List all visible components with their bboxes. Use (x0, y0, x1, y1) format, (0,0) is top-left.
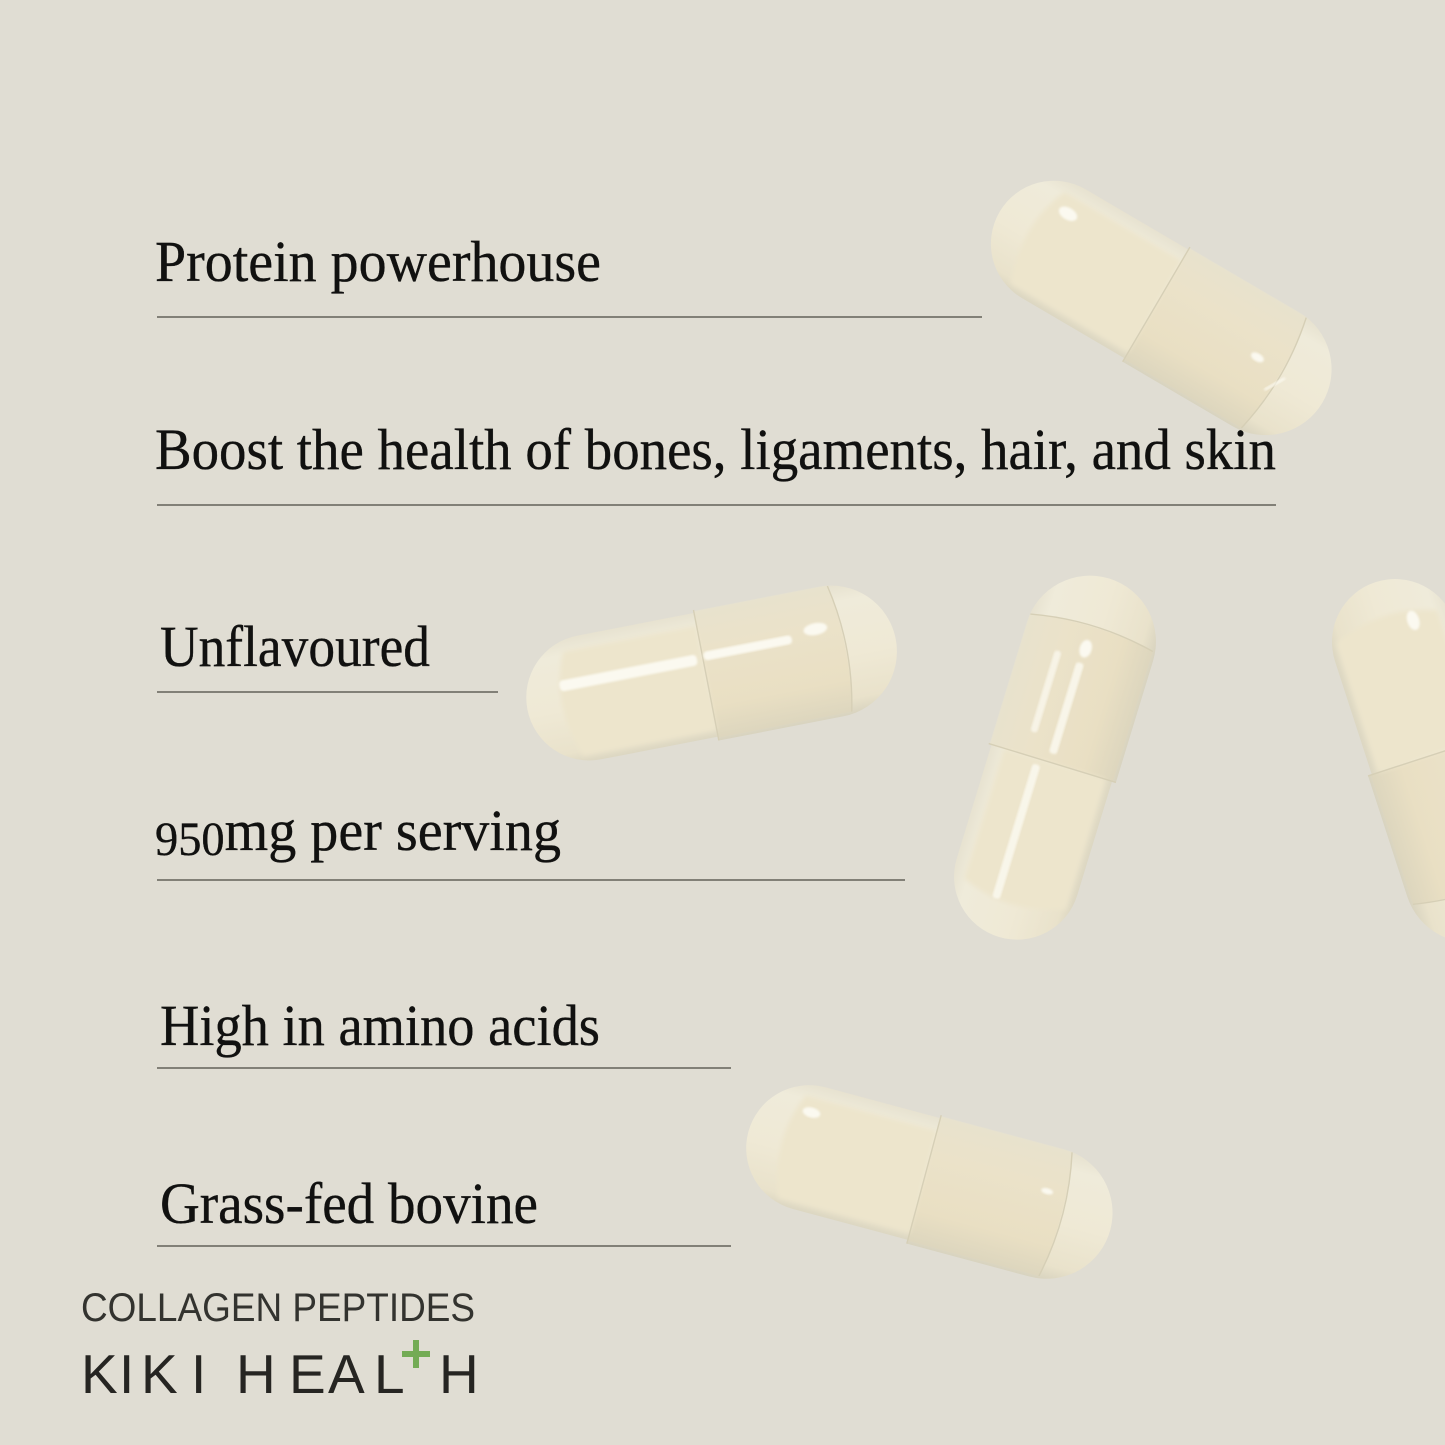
icon: green plus (402, 1340, 430, 1368)
brand logo: H (439, 1343, 479, 1405)
feature: 950mg per serving: 950 (155, 813, 225, 866)
feature: high in amino acids: High in amino acids (160, 993, 600, 1058)
feature: protein powerhouse: Protein powerhouse (155, 229, 601, 294)
capsule: right edge, cropped (1312, 562, 1445, 959)
product name: COLLAGEN PEPTIDES (81, 1286, 475, 1330)
capsule: lower (731, 1068, 1128, 1294)
feature: 950mg per serving (155, 798, 905, 880)
feature: unflavoured: Unflavoured (160, 614, 430, 679)
feature: grass-fed bovine: Grass-fed bovine (160, 1171, 538, 1236)
feature: 950mg per serving: mg per serving (225, 798, 561, 863)
feature: boost health: Boost the health of bones, ligaments, hair, and skin (155, 417, 1276, 482)
capsule: top right (966, 155, 1356, 459)
capsule: middle centre (936, 559, 1172, 956)
capsule: middle left (515, 573, 908, 775)
brand logo: KIKIHEAL (81, 1343, 405, 1405)
